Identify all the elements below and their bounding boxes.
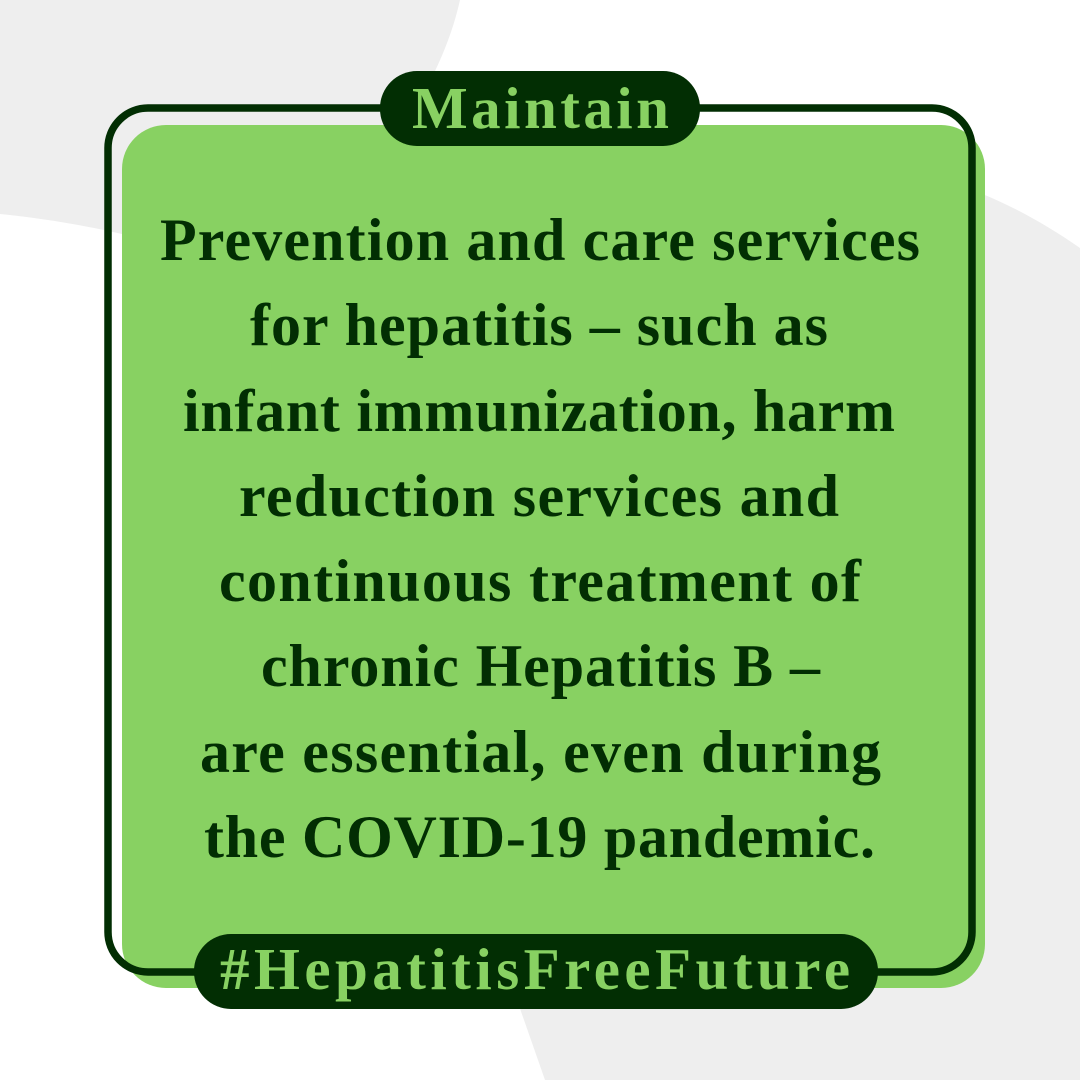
heading pill: Maintain: Maintain (412, 75, 669, 141)
body text block: are essential, even during (200, 719, 881, 785)
body text block: the COVID-19 pandemic. (204, 804, 875, 870)
body text block: Prevention and care services (160, 207, 920, 273)
body text block: chronic Hepatitis B – (261, 633, 821, 699)
body text block: infant immunization, harm (183, 378, 895, 444)
body text block: reduction services and (239, 463, 839, 529)
body text block: continuous treatment of (219, 548, 862, 614)
body text block: for hepatitis – such as (250, 292, 828, 358)
hashtag pill: #HepatitisFreeFuture: #HepatitisFreeFuture (220, 936, 850, 1002)
body text block (160, 207, 920, 870)
green content panel (122, 125, 985, 988)
background shape: top-left grey blob (0, 0, 460, 236)
background shape: bottom-right grey blob (517, 193, 1080, 1080)
dark outline frame (108, 108, 972, 972)
